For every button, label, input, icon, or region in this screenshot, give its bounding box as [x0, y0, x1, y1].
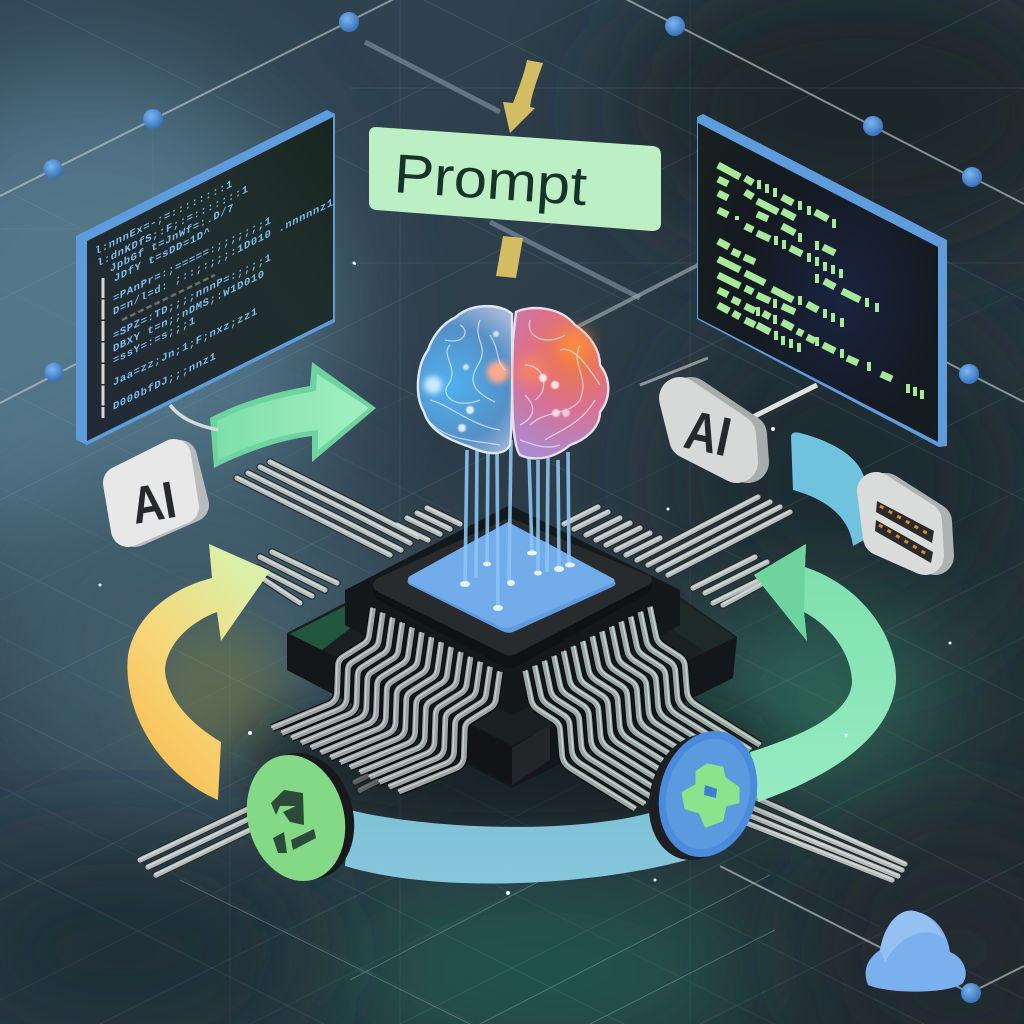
screen code text: =SPZ=:TD;;;;nnnP=:;;;;1 — [113, 252, 272, 343]
disc gear glyph — [683, 765, 738, 826]
screen code text: =PAnPr=:;=====:;;;;;;;1 — [113, 215, 272, 306]
microchip — [242, 505, 782, 830]
AI text: AI — [680, 398, 736, 468]
screen code text: D000bfDJ;;;nnz1 — [113, 351, 216, 414]
chip outer base — [287, 597, 737, 788]
brain left lobe — [418, 306, 512, 453]
screen scrollbar — [102, 278, 104, 418]
disc glyph — [271, 790, 316, 853]
screen code text: JpbGf t=JnWf=:.D/7 — [110, 202, 234, 276]
chip blue top plate — [408, 522, 616, 633]
brain right lobe — [512, 308, 608, 458]
arrow: green curved right — [750, 544, 896, 802]
small chip badge — [875, 491, 935, 563]
chip front cube — [462, 720, 512, 785]
prompt text: Prompt — [392, 142, 589, 217]
badge: green disc — [233, 742, 368, 892]
screen green code blocks — [718, 165, 922, 399]
brain glow spots — [424, 331, 589, 432]
screen code text — [95, 179, 334, 414]
screen code text: l:dnKDfS;:F;:=:::::::1 — [97, 184, 249, 271]
screen code text: =ssY=:=s;;;1 — [113, 315, 196, 368]
arrow: yellow curved left — [127, 544, 270, 800]
brain folds — [428, 320, 600, 447]
arrow: yellow down into prompt — [503, 60, 543, 133]
AI badge left — [120, 456, 192, 536]
glass fibres from brain to chip — [460, 440, 575, 611]
screen code text: Jaa=zz;Jn;1;F;nxz;zz1 — [113, 306, 258, 390]
panel: right code screen — [697, 114, 947, 447]
cloud icon — [866, 911, 966, 992]
prompt label — [369, 127, 661, 231]
screen code text: DBXY t=n;;nDMS;:W1D010 — [113, 269, 265, 356]
cycle band: blue — [345, 810, 694, 884]
brain — [418, 306, 608, 458]
lower-right wire bank — [525, 606, 761, 809]
upper chip pin banks — [140, 461, 905, 880]
arrow: teal curved tab — [791, 432, 865, 546]
lower-left wire bank — [271, 607, 500, 792]
badge: blue disc — [635, 720, 771, 871]
AI text: AI — [127, 471, 180, 536]
AI badge right — [680, 398, 748, 468]
arrow: green upper left — [210, 362, 376, 468]
screen code text: JDfY t=sDD=1D^ — [114, 226, 211, 286]
screen code text: D=n/l=d: ;::;:;;;:1D010 .nnnnnz1 — [113, 197, 334, 319]
panel: left code screen — [76, 110, 335, 445]
chip middle tier — [345, 505, 680, 715]
badge chip strips — [876, 501, 934, 543]
screen code text: l:nnnEx=-;=::::::::1 — [95, 179, 233, 259]
chip top tier — [373, 519, 652, 668]
sparkle points — [98, 262, 952, 895]
chip shadow — [242, 690, 782, 830]
arrow: yellow connector below prompt — [496, 236, 523, 278]
connector pin: left screen to arrow — [170, 405, 218, 430]
